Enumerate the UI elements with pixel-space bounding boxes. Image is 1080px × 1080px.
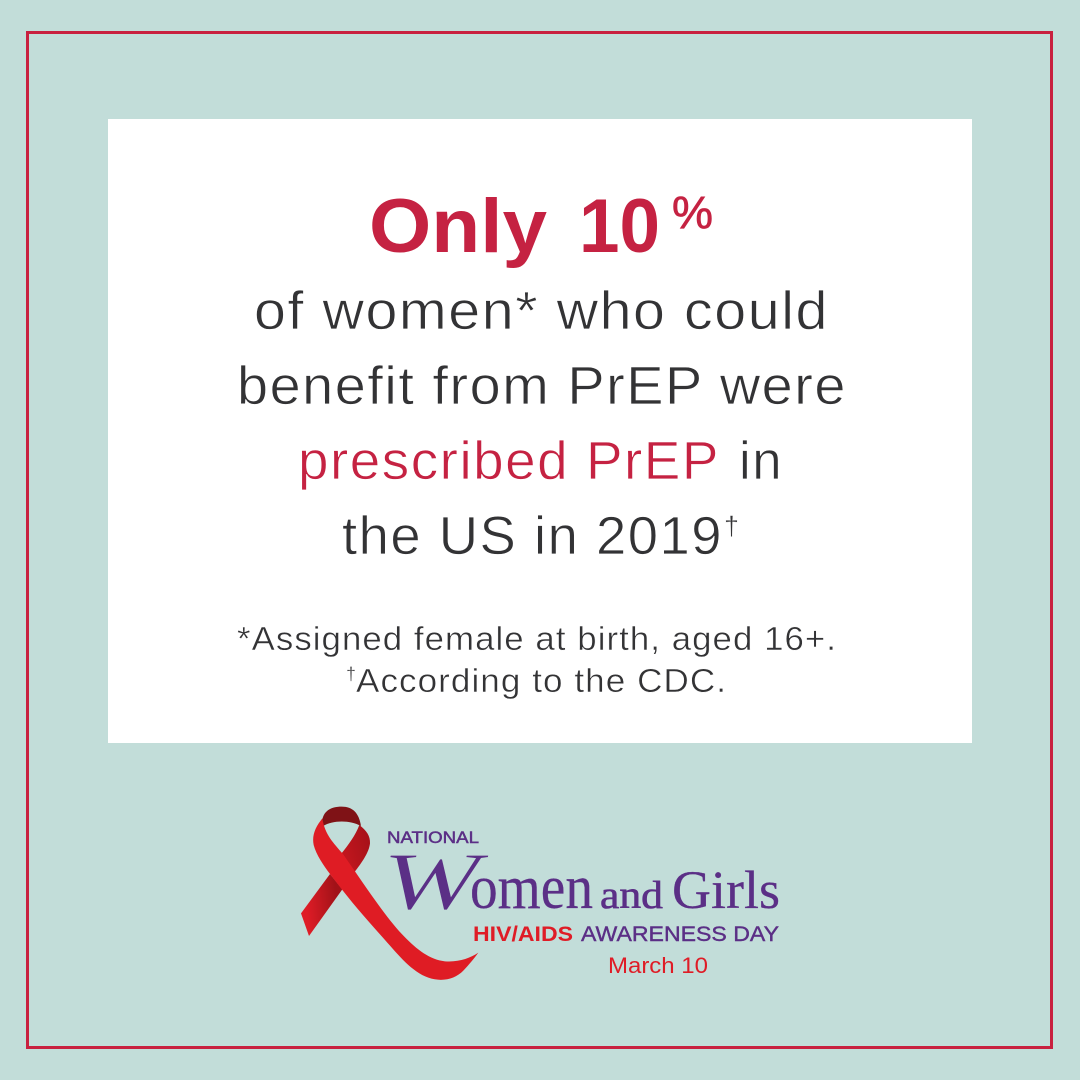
body text: of women* who could: [254, 281, 829, 341]
logo: National Women and Girls HIV/AIDS Awareness Day: [301, 807, 780, 980]
body text: benefit from PrEP were: [237, 356, 847, 416]
body text: [237, 281, 847, 566]
footnotes: *Assigned female at birth, aged 16+.: [237, 620, 837, 657]
heading: Only 10%: %: [672, 187, 713, 238]
logo text: March 10: March 10: [608, 953, 708, 978]
logo text: HIV/AIDS Awareness Day: [473, 923, 779, 946]
logo text: HIV/AIDS Awareness Day: HIV/AIDS: [473, 923, 573, 946]
logo text: Women and Girls: W: [382, 836, 490, 927]
body text: the US in 2019: [342, 506, 723, 566]
icon: red awareness ribbon: [301, 807, 478, 980]
logo text: Women and Girls: [382, 836, 780, 927]
logo text: National: NATIONAL: [387, 828, 479, 847]
heading: Only 10%: 10: [579, 184, 660, 269]
heading: Only 10%: [369, 184, 713, 269]
logo text: Women and Girls: Girls: [672, 860, 780, 920]
footnotes: According to the CDC.: [356, 662, 727, 699]
highlighted line: prescribed PrEP in: prescribed PrEP: [298, 431, 720, 491]
logo text: HIV/AIDS Awareness Day: AWARENESS DAY: [581, 923, 779, 946]
footnotes: †: [346, 664, 356, 684]
logo text: Women and Girls: and: [600, 874, 664, 917]
heading: Only 10%: Only: [369, 184, 547, 269]
highlighted line: prescribed PrEP in: in: [739, 431, 783, 491]
body text: †: [724, 511, 739, 541]
logo text: Women and Girls: omen: [470, 854, 593, 922]
footnotes: [237, 620, 837, 699]
panel: white message card: [108, 119, 972, 743]
